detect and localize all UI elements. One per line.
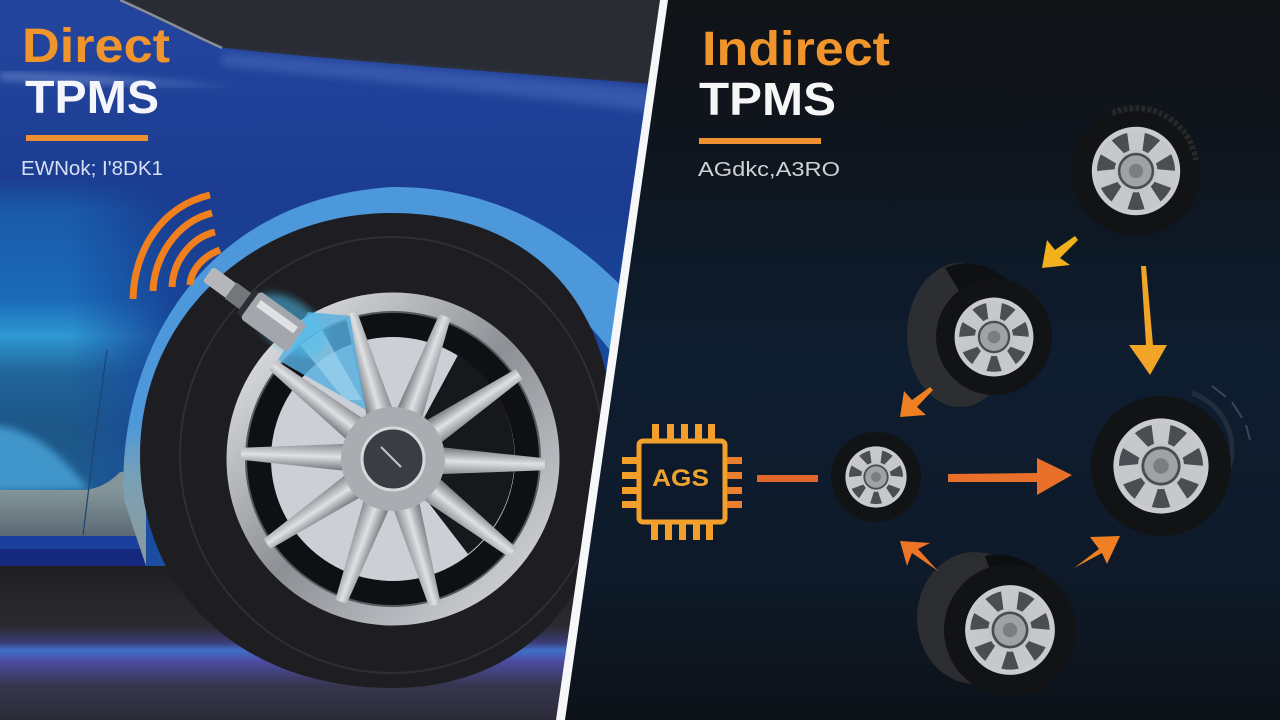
fender arch [123,187,625,566]
door seam [83,350,107,535]
hub [341,407,445,511]
wheel: top [1071,106,1201,236]
brake disc [271,337,515,581]
panel: indirect TPMS background [540,0,1280,720]
floor [0,566,574,720]
sidewall line [180,237,604,673]
tire [140,213,614,688]
blue sensor beam [278,312,366,410]
chip pins [622,424,715,540]
divider [556,0,668,720]
car body [0,0,650,580]
spokes [241,309,545,609]
underline [699,138,821,144]
line: ABS chip to center wheel [757,475,818,482]
panel: direct TPMS car illustration [0,0,670,720]
heading: Indirect TPMS [698,23,890,181]
arrow: center wheel to right wheel [948,458,1072,495]
wheel: upper left tilted [907,263,1052,407]
arrow: top wheel to right wheel [1129,266,1167,375]
title: Direct: Direct [22,20,170,73]
title: Indirect: Indirect [702,23,890,76]
icon: ABS chip [622,424,742,540]
arrow: bottom wheel to right wheel [1074,536,1120,568]
sensor glow [254,288,328,358]
sill [0,536,146,549]
subtitle: EWNok; I'8DK1 [21,158,163,180]
shoulder highlight [222,52,650,112]
signal waves [133,195,220,299]
wheel: right large [1091,386,1250,536]
title: TPMS: TPMS [25,71,159,123]
chip label: AGS [652,465,709,492]
rim ring [236,302,550,616]
wheel: small center [831,432,921,522]
subtitle: AGdkc,A3RO [698,159,840,181]
alloy wheel [236,302,550,616]
valve sensor [204,268,306,351]
arrow: left wheel to center wheel [900,387,933,417]
door reflections [0,186,162,536]
title: TPMS: TPMS [699,73,836,125]
sky backdrop [118,0,660,84]
underline [26,135,148,141]
arrow: bottom wheel to center wheel [900,541,938,571]
arrow: top wheel to left wheel [1042,236,1078,268]
window trim [120,0,222,48]
chip body [639,441,725,522]
streak [0,72,240,87]
wheel: bottom tilted [917,552,1076,696]
heading: Direct TPMS [21,20,170,180]
